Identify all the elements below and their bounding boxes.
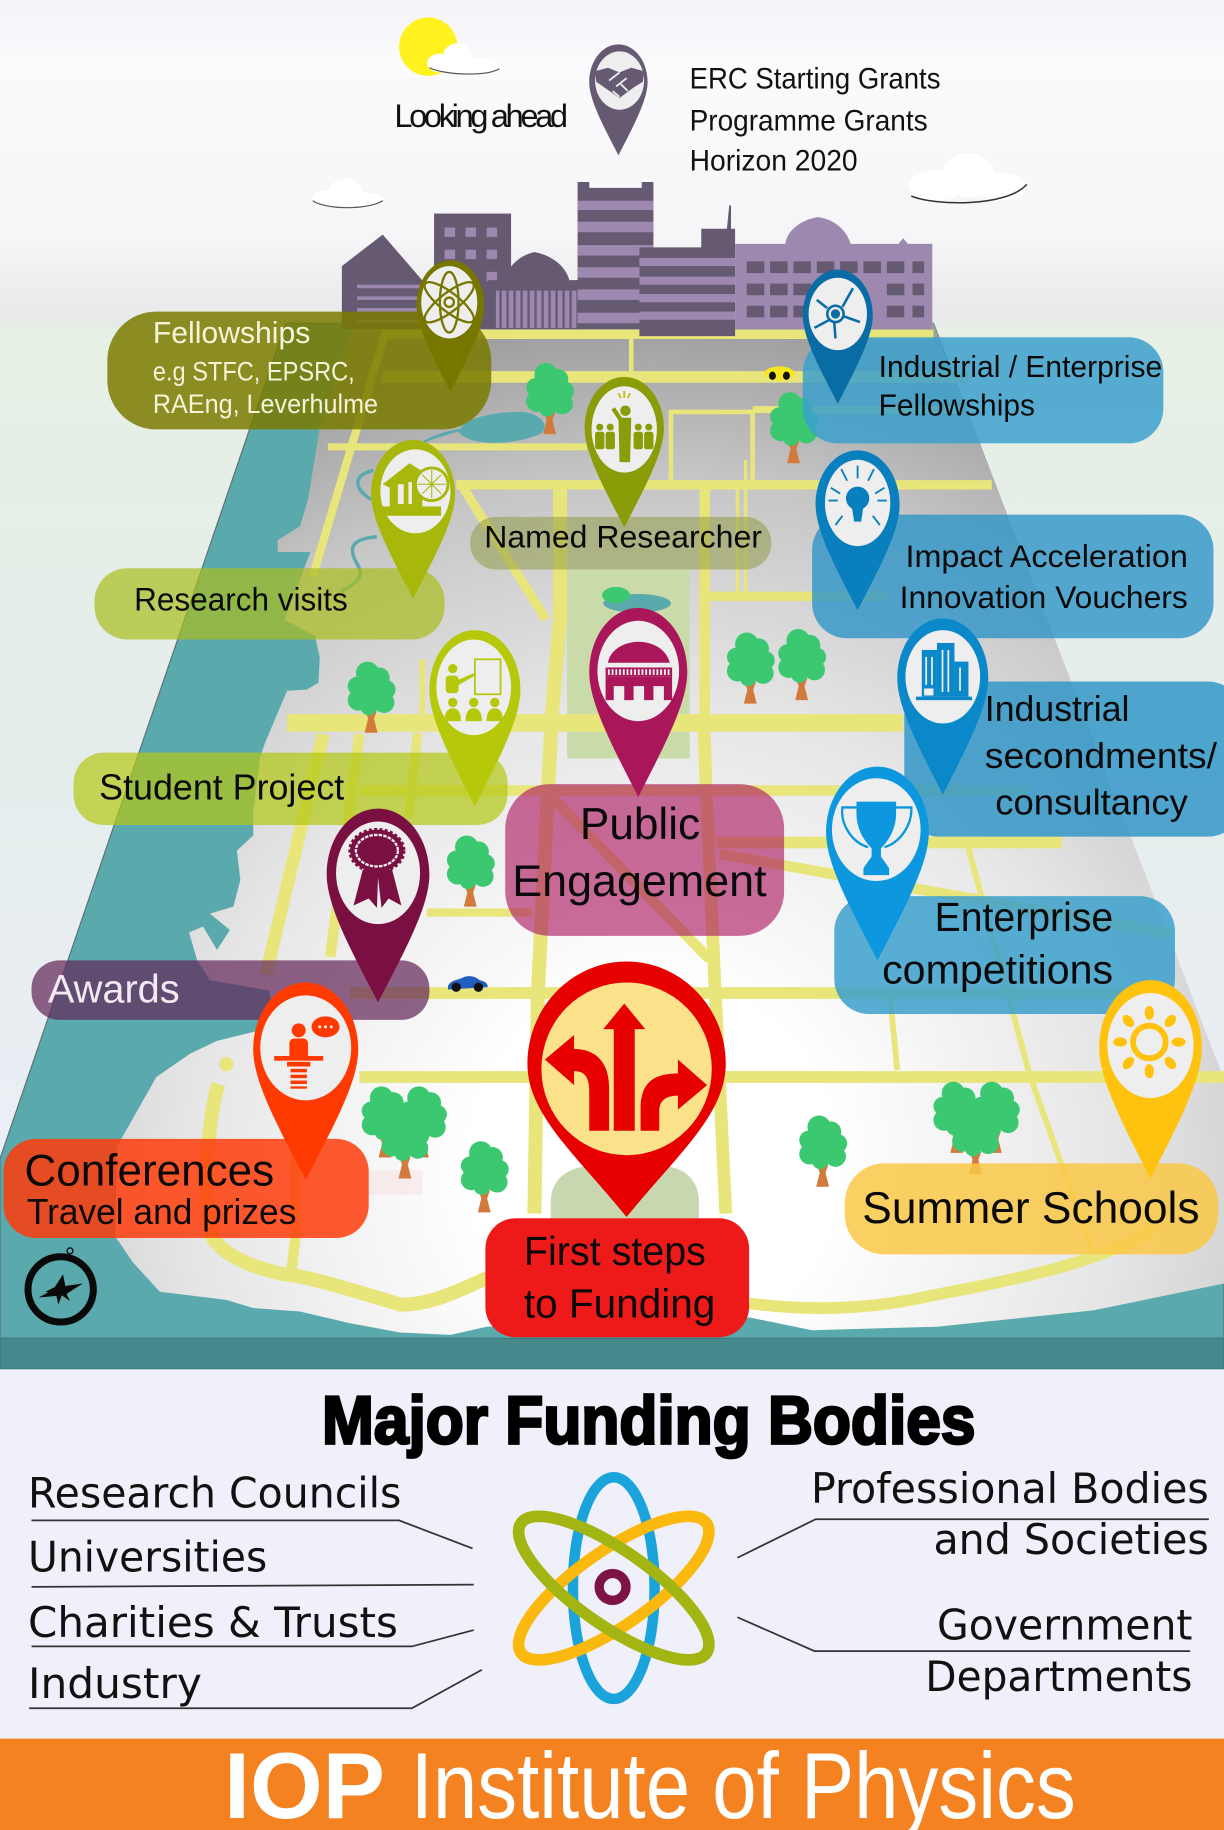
pin: Enterprise trophy [826,767,929,960]
label: Industrial secondments / consultancy: secondments/ [985,735,1218,776]
list: funding bodies right: Professional Bodies [811,1464,1209,1513]
label: Fellowships: RAEng, Leverhulme [153,389,378,419]
label: Public Engagement: Engagement [512,857,767,906]
list: funding bodies right: Government [937,1600,1192,1649]
label: Industrial / Enterprise Fellowships: Industrial / Enterprise [879,351,1162,384]
heading: Major Funding Bodies: Major Funding Bodies [322,1383,975,1458]
text: future grants: Horizon 2020 [690,145,858,177]
footer logo text [224,1734,1076,1830]
cloud by sun [427,43,499,74]
label: Fellowships [107,312,491,429]
pin: Impact bulb [816,450,900,610]
label: Research visits: Research visits [134,580,348,617]
city skyline [342,182,932,336]
list: funding bodies right: Departments [925,1652,1192,1701]
pin: Summer Schools sun [1099,980,1202,1179]
label: Enterprise competitions: Enterprise [935,894,1113,940]
pin: Fellowships atom [417,260,484,392]
yellow car [764,366,795,380]
map land [116,323,1224,1335]
label: Research visits [95,568,445,639]
text: future grants [690,64,940,177]
list: funding bodies left: Charities & Trusts [28,1598,398,1647]
text: Looking ahead: Looking ahead [394,97,567,134]
tower [578,182,653,329]
domed hall [488,252,581,329]
label: Public Engagement [505,784,784,936]
pin: Awards rosette [327,809,429,1002]
label: Student Project: Student Project [99,766,344,807]
pin: Research visits house [371,440,455,599]
label: Industrial / Enterprise Fellowships: Fellowships [879,389,1035,422]
sky background [0,0,1224,328]
ground background [0,328,1224,1369]
label: Enterprise competitions: competitions [882,947,1113,993]
pin: Looking ahead handshake [589,44,648,155]
label: First steps to Funding: First steps [524,1228,706,1274]
label: First steps to Funding [485,1218,749,1337]
label: Impact Acceleration Innovation Vouchers: Impact Acceleration [905,538,1188,574]
icon: compass [28,1248,93,1322]
label: Named Researcher: Named Researcher [484,518,762,554]
label: Public Engagement: Public [580,800,700,849]
text: future grants: Programme Grants [690,106,928,138]
label: Impact Acceleration Innovation Vouchers [812,515,1213,638]
label: Awards [32,960,429,1020]
label: Industrial secondments / consultancy: Industrial [985,688,1129,729]
label: Named Researcher [470,517,771,569]
label: Fellowships: Fellowships [153,317,310,350]
list: funding bodies right [811,1464,1209,1701]
pin: Industrial Fellowships hub [803,270,873,404]
trees [348,363,1020,1212]
leader lines [29,1519,1209,1708]
label: Conferences Travel and prizes: Travel and prizes [27,1191,296,1232]
block with windows [434,214,511,329]
green plaza [551,1166,699,1218]
pin: Public Engagement building [589,608,687,797]
pin: Industrial secondments offices [897,618,988,795]
mid-rise block [639,205,735,336]
label: Summer Schools: Summer Schools [862,1184,1199,1233]
list: funding bodies right: and Societies [933,1515,1209,1564]
bottom teal band [0,1338,1224,1369]
label: Conferences Travel and prizes [4,1139,369,1238]
list: funding bodies left [28,1469,401,1708]
pin: Conferences speaker [253,983,358,1180]
sun [399,18,457,76]
blue car [448,976,488,992]
label: Conferences Travel and prizes: Conferences [25,1147,274,1196]
faint patch [366,1170,422,1195]
icon: atom [500,1477,728,1699]
label: Awards: Awards [48,967,180,1011]
pin: Named Researcher people [585,377,664,527]
label: Student Project [74,753,508,825]
lower panel background [0,1369,1224,1737]
road network [207,330,1224,1308]
label: Industrial / Enterprise Fellowships [803,337,1163,443]
list: funding bodies left: Universities [28,1533,267,1582]
cloud left [313,179,383,208]
pin: Student Project presenter [429,630,520,806]
cloud right [909,153,1027,203]
lake small [603,594,671,613]
list: funding bodies left: Industry [28,1659,202,1708]
label: Industrial secondments / consultancy: consultancy [995,781,1188,822]
house building [342,235,427,329]
grand building with dome [735,217,932,329]
green park strip [567,569,690,758]
label: Summer Schools [845,1163,1218,1254]
list: funding bodies left: Research Councils [28,1469,401,1518]
bush by lake [602,587,630,603]
pin: First steps arrows [527,961,726,1217]
label: Impact Acceleration Innovation Vouchers: Innovation Vouchers [900,579,1188,615]
footer bar [0,1739,1224,1830]
label: Enterprise competitions [834,894,1175,1014]
river [341,470,377,592]
map water [0,323,1224,1338]
label: First steps to Funding: to Funding [524,1280,715,1326]
lake top [424,413,543,442]
label: Industrial secondments / consultancy [904,681,1224,837]
label: Fellowships: e.g STFC, EPSRC, [153,356,355,386]
text: future grants: ERC Starting Grants [690,64,940,96]
